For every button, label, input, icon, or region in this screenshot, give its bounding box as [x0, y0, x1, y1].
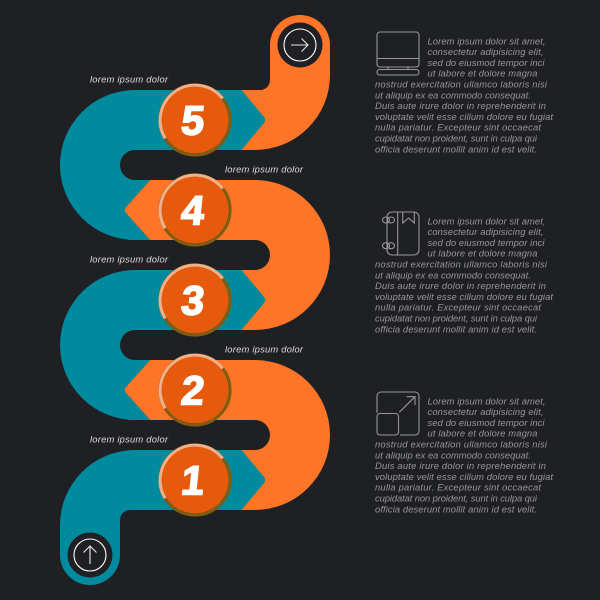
text block: middle: consectetur adipisicing elit,	[428, 226, 544, 237]
badge: step 5: 5	[179, 98, 207, 143]
text block: middle: nulla pariatur. Excepteur sint occaecat	[375, 302, 541, 313]
text block: top: nulla pariatur. Excepteur sint occaecat	[375, 122, 541, 133]
text block: middle: ut aliquip ex ea commodo consequat.	[375, 269, 531, 280]
label: step 1: lorem ipsum dolor	[90, 434, 169, 444]
badge: step 5	[160, 85, 230, 155]
text block: middle: ut labore et dolore magna	[428, 248, 538, 259]
text block: middle: cupidatat non proident, sunt in culpa qui	[375, 312, 538, 324]
text block: middle: Lorem ipsum dolor sit amet,	[428, 215, 546, 226]
text block: middle: sed do eiusmod tempor inci	[428, 237, 545, 248]
text block: middle: officia deserunt mollit anim id est velit.	[375, 323, 537, 334]
teal segment: step 1 with bottom cap	[60, 450, 265, 585]
text block: bottom: officia deserunt mollit anim id est velit.	[375, 503, 537, 514]
text block: top: ut labore et dolore magna	[428, 68, 538, 79]
text block: top	[375, 35, 553, 154]
text block: top: ut aliquip ex ea commodo consequat.	[375, 89, 531, 100]
text block: top: voluptate velit esse cillum dolore eu fugiat	[375, 111, 553, 122]
text block: bottom: Lorem ipsum dolor sit amet,	[428, 395, 546, 406]
orange segment: step 2 curve	[124, 360, 330, 510]
text block: bottom: ut aliquip ex ea commodo consequat.	[375, 449, 531, 460]
label: step 3: lorem ipsum dolor	[90, 254, 169, 264]
label: step 5: lorem ipsum dolor	[90, 74, 169, 84]
text block: bottom: nulla pariatur. Excepteur sint occaecat	[375, 482, 541, 493]
text block: bottom: sed do eiusmod tempor inci	[428, 417, 545, 428]
text block: middle	[375, 215, 553, 334]
text block: middle: nostrud exercitation ullamco laboris nisi	[375, 258, 548, 270]
snake ribbon	[60, 15, 330, 585]
text block: top: consectetur adipisicing elit,	[428, 46, 544, 57]
label: step 2: lorem ipsum dolor	[225, 344, 304, 354]
text block: top: officia deserunt mollit anim id est velit.	[375, 143, 537, 154]
icon: end arrow right	[278, 22, 322, 68]
badge: step 3: 3	[179, 278, 207, 323]
badge: step 2: 2	[179, 368, 207, 413]
text block: top: Duis aute irure dolor in reprehenderit in	[375, 100, 546, 111]
badge: step 4: 4	[179, 188, 207, 233]
badge: step 1	[160, 445, 230, 515]
teal segment: step 5 curve	[60, 90, 265, 240]
orange segment: step 4 curve	[124, 180, 330, 330]
text block: bottom	[375, 395, 553, 514]
text block: bottom: ut labore et dolore magna	[428, 428, 538, 439]
icon: start arrow up	[68, 532, 112, 578]
text block: top: sed do eiusmod tempor inci	[428, 57, 545, 68]
icon: monitor	[377, 32, 419, 75]
text block: top: Lorem ipsum dolor sit amet,	[428, 35, 546, 46]
orange segment: top with arrow cap	[235, 15, 330, 150]
text block: bottom: Duis aute irure dolor in reprehenderit in	[375, 460, 546, 471]
badge: step 3	[160, 265, 230, 335]
badge: step 1: 1	[179, 458, 207, 503]
teal segment: step 3 curve	[60, 270, 265, 420]
text block: top: nostrud exercitation ullamco laboris nisi	[375, 78, 548, 90]
text block: bottom: nostrud exercitation ullamco laboris nisi	[375, 438, 548, 450]
badge: step 2	[160, 355, 230, 425]
label: step 4: lorem ipsum dolor	[225, 164, 304, 174]
text block: middle: voluptate velit esse cillum dolore eu fugiat	[375, 291, 553, 302]
text block: bottom: consectetur adipisicing elit,	[428, 406, 544, 417]
text block: top: cupidatat non proident, sunt in culpa qui	[375, 132, 538, 144]
icon: expand	[377, 392, 419, 435]
text block: bottom: voluptate velit esse cillum dolore eu fugiat	[375, 471, 553, 482]
badge: step 4	[160, 175, 230, 245]
text block: bottom: cupidatat non proident, sunt in culpa qui	[375, 492, 538, 504]
text block: middle: Duis aute irure dolor in reprehenderit in	[375, 280, 546, 291]
icon: notebook	[382, 212, 419, 255]
